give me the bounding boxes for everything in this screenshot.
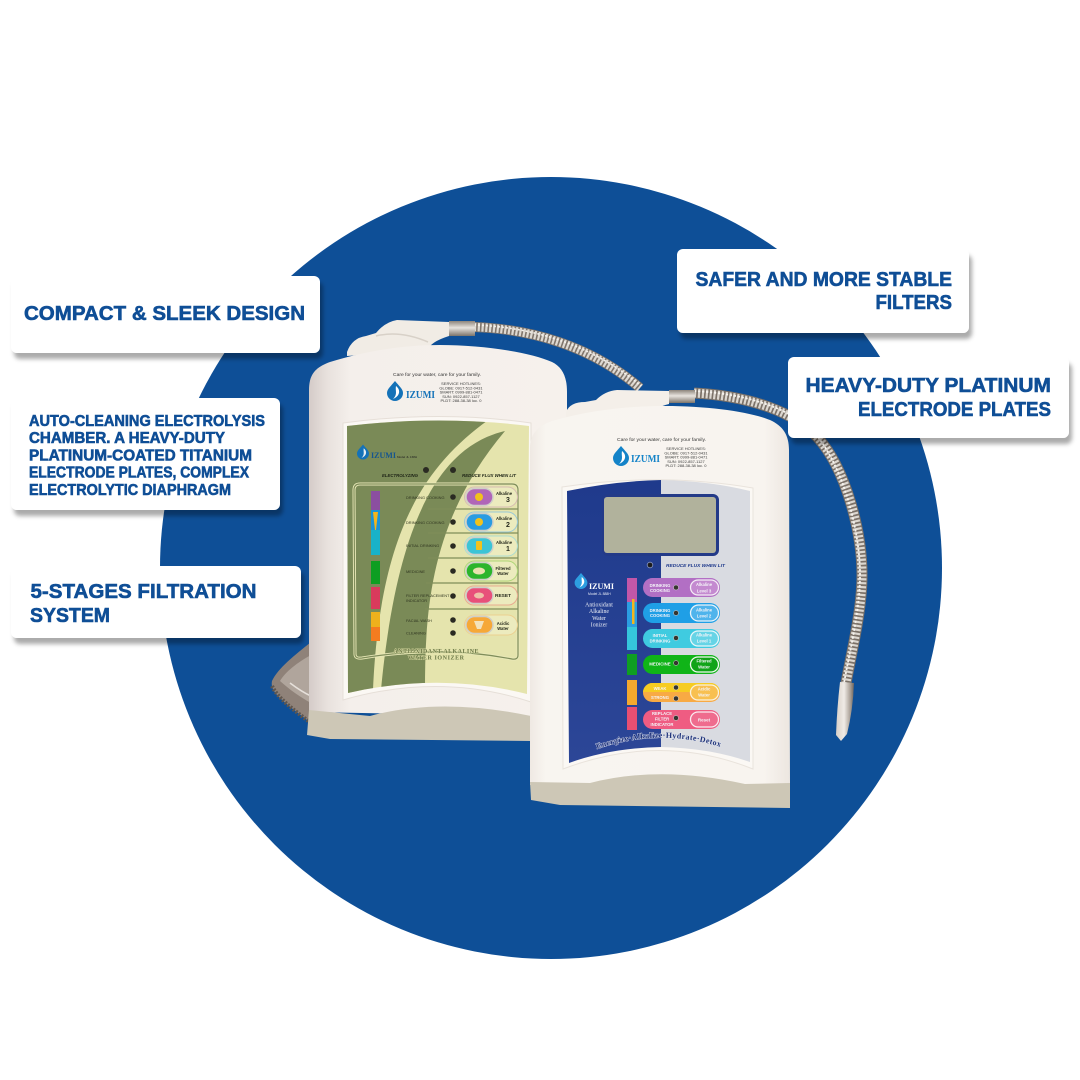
front ionizer: function pills: DRINKING	[650, 608, 670, 613]
front ionizer: logo drop	[613, 446, 629, 466]
front ionizer: function pills: COOKING	[650, 588, 670, 593]
left ionizer: buttons: 1	[506, 546, 510, 553]
front ionizer: function pills: DRINKING	[650, 638, 670, 644]
left ionizer: sticker text: PLDT: 288-38-38 loc. 0	[441, 398, 482, 403]
front ionizer: function pills: Water	[698, 692, 710, 698]
card: auto-cleaning electrolysis: AUTO-CLEANING ELECTROLYSIS	[29, 413, 265, 430]
left ionizer: buttons	[464, 487, 518, 635]
front ionizer: sticker text: Care for your water, care for your family.	[617, 437, 706, 442]
front ionizer: product description	[585, 602, 613, 628]
card: filtration system: 5-STAGES FILTRATION	[30, 580, 256, 603]
front ionizer: function pills: Acidic	[698, 686, 711, 692]
front ionizer: LCD display	[602, 494, 719, 556]
front ionizer: function pills: REPLACE	[652, 711, 672, 716]
left ionizer: sticker text: SERVICE HOTLINES:	[441, 381, 481, 386]
front ionizer: function pills: MEDICINE	[649, 662, 671, 666]
front ionizer: body	[530, 406, 790, 785]
left ionizer: buttons: Water	[497, 571, 509, 576]
front ionizer: function pills: Filtered	[696, 658, 712, 664]
left ionizer	[307, 320, 567, 741]
left ionizer: row labels: INDICATOR	[406, 598, 427, 603]
left ionizer: row labels	[406, 495, 450, 636]
left ionizer: sticker text: GLOBE: 0917-512-0431	[439, 386, 483, 390]
card: compact design: COMPACT & SLEEK DESIGN	[24, 303, 305, 325]
left ionizer: panel logo	[357, 444, 417, 460]
front ionizer: function pills: FILTER	[655, 716, 669, 722]
front ionizer: sticker text: SERVICE HOTLINES:	[666, 446, 706, 451]
card: filtration system: SYSTEM	[30, 604, 110, 627]
front ionizer: function pills: Alkaline	[696, 582, 713, 587]
left ionizer: sticker text: SMART: 0999-881-0471	[440, 390, 483, 394]
front ionizer: function pills: Level 3	[697, 588, 712, 594]
left ionizer: hose	[474, 325, 641, 388]
card: filtration system	[11, 566, 301, 638]
card: platinum electrode plates: ELECTRODE PLATES	[858, 398, 1051, 421]
left ionizer: row labels: FILTER REPLACEMENT	[406, 593, 450, 598]
front ionizer: sticker text: PLDT: 288-38-38 loc. 0	[666, 463, 707, 468]
front ionizer	[530, 390, 790, 808]
front ionizer: function pills: Water	[698, 664, 710, 670]
left ionizer: buttons: 3	[506, 497, 510, 504]
front ionizer: sticker text: GLOBE: 0917-512-0431	[664, 450, 708, 456]
front ionizer: flux indicator	[647, 562, 725, 568]
left ionizer: product name	[394, 649, 478, 662]
left ionizer: product name: WATER IONIZER	[408, 656, 465, 662]
front ionizer: function pills: COOKING	[650, 613, 670, 618]
left ionizer: base	[307, 706, 531, 741]
left ionizer: body	[309, 345, 567, 716]
left ionizer: top indicators: REDUCE FLUX WHEN LIT	[462, 473, 516, 478]
card: auto-cleaning electrolysis: ELECTRODE PLATES, COMPLEX	[29, 464, 250, 482]
front ionizer: base	[530, 774, 790, 808]
left ionizer: color scale tabs	[371, 491, 380, 641]
left ionizer: logo drop	[387, 381, 403, 401]
left ionizer: row labels: FACIAL WASH	[406, 618, 432, 623]
left ionizer: buttons: Water	[497, 626, 509, 631]
front ionizer: function pills: Alkaline	[696, 608, 713, 612]
front ionizer: function pills: Level 1	[697, 638, 712, 644]
front ionizer: curved slogan: Energize·Alkalize·Hydrate·Detox	[595, 732, 722, 750]
left ionizer: dial cap	[347, 320, 475, 356]
front ionizer: panel logo	[575, 573, 615, 596]
hose nozzle tip	[836, 682, 854, 741]
front ionizer: panel frame	[562, 480, 753, 769]
left ionizer: buttons: 2	[506, 522, 510, 529]
card: auto-cleaning electrolysis: ELECTROLYTIC DIAPHRAGM	[29, 482, 231, 499]
front ionizer: sticker text: SUN: 0922-857-1127	[667, 459, 706, 464]
front ionizer: flux indicator: REDUCE FLUX WHEN LIT	[666, 563, 725, 568]
left ionizer: panel frame	[343, 416, 531, 702]
left ionizer: sticker text: Care for your water, care for your family.	[393, 372, 481, 377]
left ionizer: buttons: Filtered	[495, 566, 511, 571]
card: platinum electrode plates: HEAVY-DUTY PLATINUM	[806, 374, 1051, 397]
front ionizer: function pills: Level 2	[697, 614, 712, 618]
left ionizer: sticker text: IZUMI	[406, 389, 435, 401]
left ionizer: sticker text	[387, 372, 483, 403]
front ionizer: sticker text	[613, 437, 708, 468]
left ionizer: top indicators: ELECTROLYZING	[382, 473, 419, 478]
front ionizer: product description: Water	[592, 616, 606, 622]
left ionizer: row outlines	[354, 484, 518, 659]
front ionizer: function pills: INITIAL	[653, 633, 668, 638]
left ionizer: buttons: Alkaline	[496, 491, 513, 496]
front ionizer: product description: Ionizer	[591, 622, 607, 628]
front ionizer: function pills: Alkaline	[696, 632, 713, 638]
front ionizer: dial cap	[566, 390, 695, 418]
front ionizer: blue panel side	[567, 480, 661, 763]
left ionizer: sticker text: SUN: 0922-857-1127	[442, 394, 481, 399]
front ionizer: hose	[694, 391, 862, 741]
left ionizer: row labels: DRINKING COOKING	[406, 520, 444, 525]
front ionizer: function pills: DRINKING	[650, 583, 670, 588]
card: auto-cleaning electrolysis: CHAMBER. A HEAVY-DUTY	[29, 430, 226, 447]
left ionizer: buttons: RESET	[495, 593, 511, 599]
front ionizer: function pills: INDICATOR	[651, 722, 673, 727]
left ionizer: row labels: CLEANING	[406, 630, 426, 636]
card: auto-cleaning electrolysis: PLATINUM-COATED TITANIUM	[29, 448, 252, 464]
front ionizer: product description: Antioxidant	[585, 602, 613, 608]
coiled hose behind left ionizer	[272, 642, 311, 723]
front ionizer: sticker text: SMART: 0999-881-0471	[665, 454, 708, 460]
background circle	[160, 177, 942, 959]
front ionizer: function pills: Reset	[698, 718, 711, 722]
left ionizer: panel logo: IZUMI	[371, 450, 397, 460]
left ionizer: row labels: MEDICINE	[406, 569, 425, 574]
front ionizer: panel logo: Model JL 888H	[588, 592, 611, 596]
card: safer filters: FILTERS	[876, 291, 952, 314]
front ionizer: panel logo: IZUMI	[589, 581, 615, 591]
front ionizer: grey panel side	[661, 480, 750, 762]
front ionizer: product description: Alkaline	[589, 609, 609, 615]
front ionizer: function pills: STRONG	[651, 695, 669, 700]
left ionizer: buttons: Alkaline	[496, 540, 513, 545]
left ionizer: green leaf panel	[347, 420, 529, 694]
left ionizer: row labels: DRINKING COOKING	[406, 495, 444, 500]
left ionizer: top indicators	[382, 467, 516, 478]
card: safer filters	[677, 249, 969, 333]
front ionizer: sticker text: IZUMI	[631, 453, 660, 465]
card: safer filters: SAFER AND MORE STABLE	[696, 268, 952, 291]
left ionizer: row labels: INITIAL DRINKING	[406, 543, 439, 548]
front ionizer: color scale tabs	[627, 578, 637, 730]
front ionizer: function pills: WEAK	[654, 686, 666, 691]
left ionizer: product name: ANTIOXIDANT ALKALINE	[394, 649, 478, 655]
left ionizer: buttons: Alkaline	[496, 516, 513, 521]
left ionizer: buttons: Acidic	[497, 621, 510, 626]
left ionizer: panel logo: Model JL 168H	[397, 455, 417, 459]
card: auto-cleaning electrolysis	[11, 398, 280, 510]
front ionizer: function pills	[643, 578, 720, 729]
card: compact design	[11, 276, 320, 353]
card: platinum electrode plates	[788, 357, 1069, 438]
left ionizer: indicator lights	[450, 494, 456, 636]
